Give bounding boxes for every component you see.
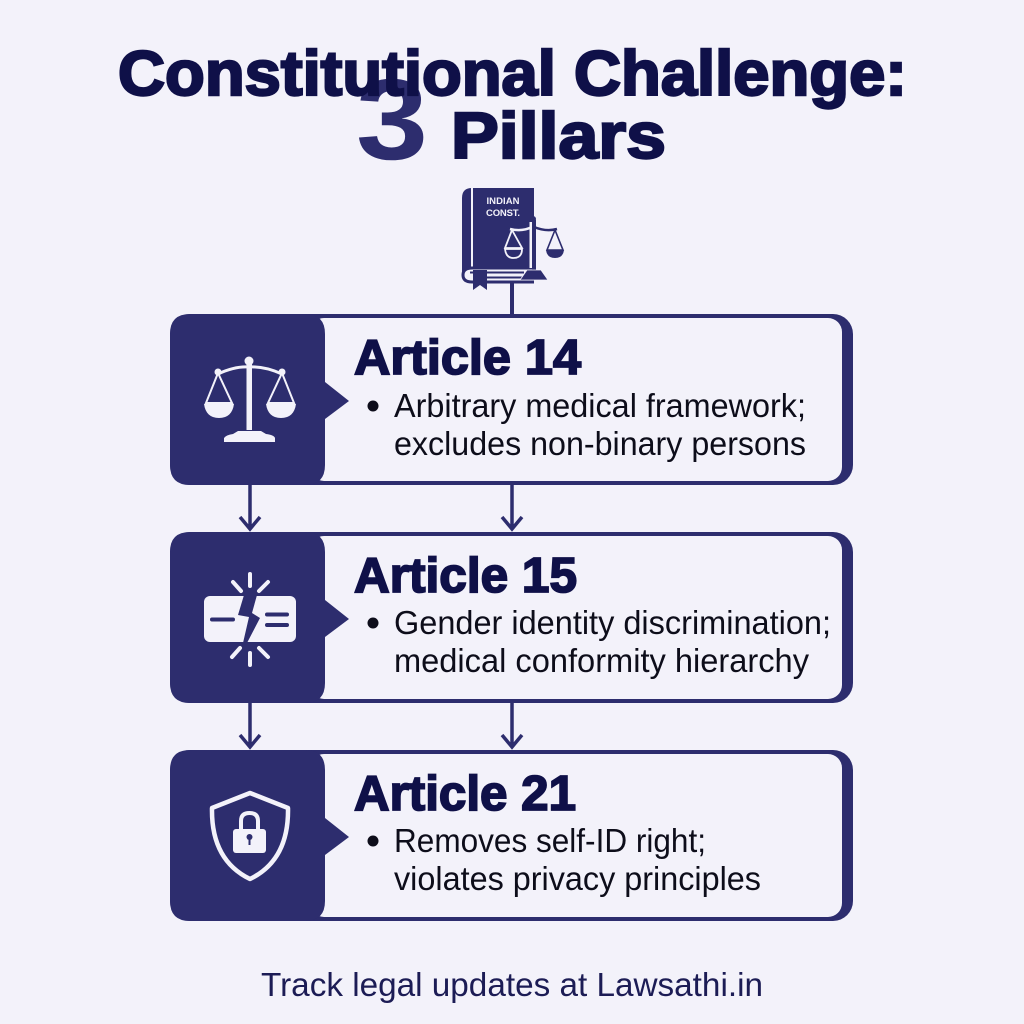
title line 1: Constitutional Challenge: (118, 39, 907, 109)
icon: constitution book with scales: INDIAN (486, 196, 520, 207)
bullet (368, 400, 378, 412)
icon: scales of justice (204, 356, 296, 442)
heading: Article 21 (354, 767, 576, 821)
panel: Article 15 (170, 532, 853, 703)
arrow: centre, 15 to 21 (502, 703, 522, 747)
arrow: left, 15 to 21 (240, 703, 260, 747)
body text line 2: medical conformity hierarchy (394, 642, 809, 679)
panel: Article 21 (170, 750, 853, 921)
icon: shield with padlock (212, 793, 288, 879)
arrow: centre, 14 to 15 (502, 485, 522, 529)
body text line 1: Gender identity discrimination; (394, 604, 831, 641)
arrow: left, 14 to 15 (240, 485, 260, 529)
body text line 2: violates privacy principles (394, 860, 761, 897)
icon tile with pointer (170, 314, 349, 485)
card body (310, 754, 842, 917)
large numeral 3: 3 (356, 56, 428, 184)
icon: constitution book with scales: CONST. (486, 208, 520, 219)
icon: constitution book with scales (462, 188, 564, 290)
title line 2: Pillars (451, 99, 666, 172)
heading: Article 14 (354, 331, 581, 385)
heading: Article 15 (354, 549, 577, 603)
body text line 2: excludes non-binary persons (394, 425, 806, 462)
body text line 1: Removes self-ID right; (394, 822, 706, 859)
card frame (170, 532, 853, 703)
card frame (170, 750, 853, 921)
card body (310, 536, 842, 699)
card body (310, 318, 842, 481)
connector from book to first card (510, 282, 514, 316)
panel: Article 14 (170, 314, 853, 485)
title (118, 39, 907, 184)
icon tile with pointer (170, 532, 349, 703)
footer: Track legal updates at Lawsathi.in (261, 966, 763, 1003)
card frame (170, 314, 853, 485)
body text line 1: Arbitrary medical framework; (394, 387, 806, 424)
bullet (368, 836, 378, 846)
icon: broken card with lightning crack (204, 574, 296, 665)
icon tile with pointer (170, 750, 349, 921)
bullet (368, 618, 378, 628)
